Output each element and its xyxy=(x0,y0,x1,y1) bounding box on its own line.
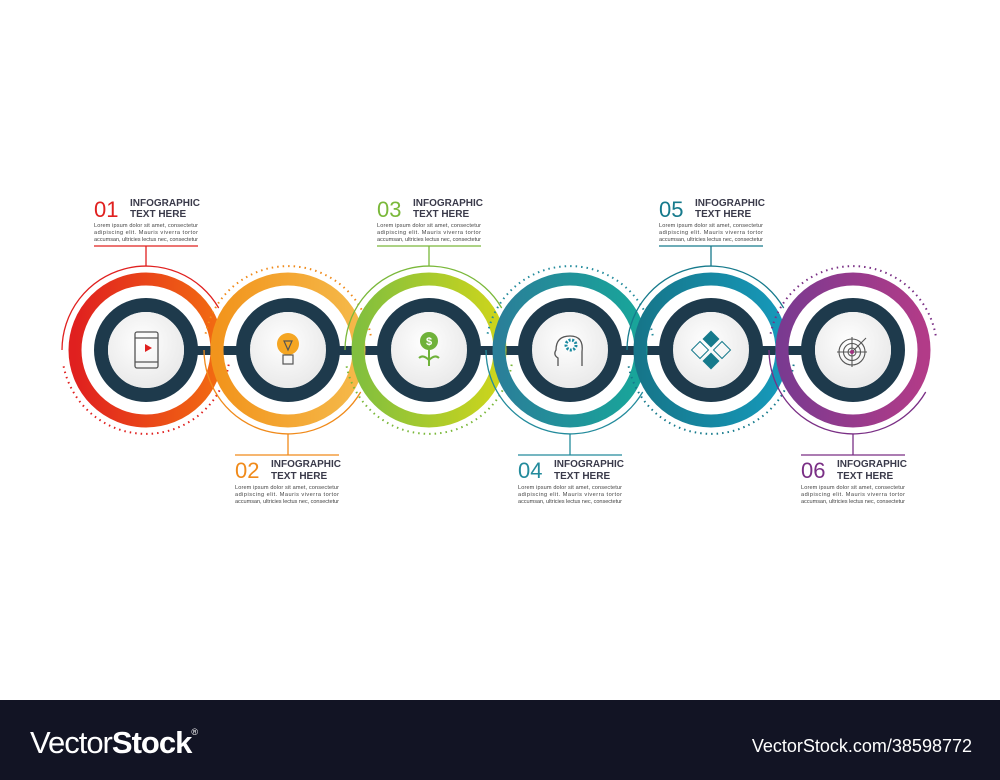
label 06: Lorem ipsum dolor sit amet, consectetur xyxy=(801,485,905,491)
label 04: INFOGRAPHIC xyxy=(554,459,624,470)
label 04 xyxy=(518,434,624,505)
connector bar xyxy=(190,346,810,355)
step 4 circle xyxy=(486,266,653,434)
label 01: accumsan, ultricies lectus nec, consectetur xyxy=(94,237,198,243)
label 06: accumsan, ultricies lectus nec, consectetur xyxy=(801,499,905,505)
label 04: TEXT HERE xyxy=(554,471,610,482)
label 02: 02 xyxy=(235,458,259,483)
step 3 circle xyxy=(345,266,512,434)
icon: tablet xyxy=(135,332,158,368)
label 02: accumsan, ultricies lectus nec, consectetur xyxy=(235,499,339,505)
label 04: adipiscing elit. Mauris viverra tortor xyxy=(518,492,622,498)
label 05: accumsan, ultricies lectus nec, consectetur xyxy=(659,237,763,243)
label 06: INFOGRAPHIC xyxy=(837,459,907,470)
label 03: INFOGRAPHIC xyxy=(413,198,483,209)
icon: puzzle xyxy=(692,331,730,369)
icon: head with gears xyxy=(555,336,582,366)
footer bar: VectorStock.com/38598772 xyxy=(752,736,972,756)
step 2 circle xyxy=(204,266,371,434)
label 01: adipiscing elit. Mauris viverra tortor xyxy=(94,230,198,236)
icon: money plant: $ xyxy=(426,336,432,348)
label 03 xyxy=(377,197,483,266)
label 03: TEXT HERE xyxy=(413,209,469,220)
footer bar: ® xyxy=(191,727,198,737)
step 6 circle xyxy=(769,266,936,434)
label 04: 04 xyxy=(518,458,542,483)
label 01: 01 xyxy=(94,197,118,222)
label 05: TEXT HERE xyxy=(695,209,751,220)
footer bar xyxy=(0,700,1000,780)
label 04: accumsan, ultricies lectus nec, consectetur xyxy=(518,499,622,505)
label 01: INFOGRAPHIC xyxy=(130,198,200,209)
label 05: INFOGRAPHIC xyxy=(695,198,765,209)
icon: light bulb xyxy=(277,333,299,364)
label 05 xyxy=(659,197,765,266)
label 06: adipiscing elit. Mauris viverra tortor xyxy=(801,492,905,498)
step 1 circle xyxy=(62,266,229,434)
footer bar: VectorStock xyxy=(30,725,191,760)
step 5 circle xyxy=(627,266,794,434)
label 01 xyxy=(94,197,200,266)
label 02: TEXT HERE xyxy=(271,471,327,482)
label 06: 06 xyxy=(801,458,825,483)
label 05: Lorem ipsum dolor sit amet, consectetur xyxy=(659,223,763,229)
label 03: Lorem ipsum dolor sit amet, consectetur xyxy=(377,223,481,229)
label 03: 03 xyxy=(377,197,401,222)
label 06 xyxy=(801,434,907,505)
label 02: INFOGRAPHIC xyxy=(271,459,341,470)
label 03: adipiscing elit. Mauris viverra tortor xyxy=(377,230,481,236)
label 05: 05 xyxy=(659,197,683,222)
label 05: adipiscing elit. Mauris viverra tortor xyxy=(659,230,763,236)
label 03: accumsan, ultricies lectus nec, consectetur xyxy=(377,237,481,243)
label 01: TEXT HERE xyxy=(130,209,186,220)
label 02 xyxy=(235,434,341,505)
label 02: adipiscing elit. Mauris viverra tortor xyxy=(235,492,339,498)
label 04: Lorem ipsum dolor sit amet, consectetur xyxy=(518,485,622,491)
label 06: TEXT HERE xyxy=(837,471,893,482)
icon: target xyxy=(837,337,867,367)
icon: money plant xyxy=(419,332,439,366)
label 02: Lorem ipsum dolor sit amet, consectetur xyxy=(235,485,339,491)
label 01: Lorem ipsum dolor sit amet, consectetur xyxy=(94,223,198,229)
